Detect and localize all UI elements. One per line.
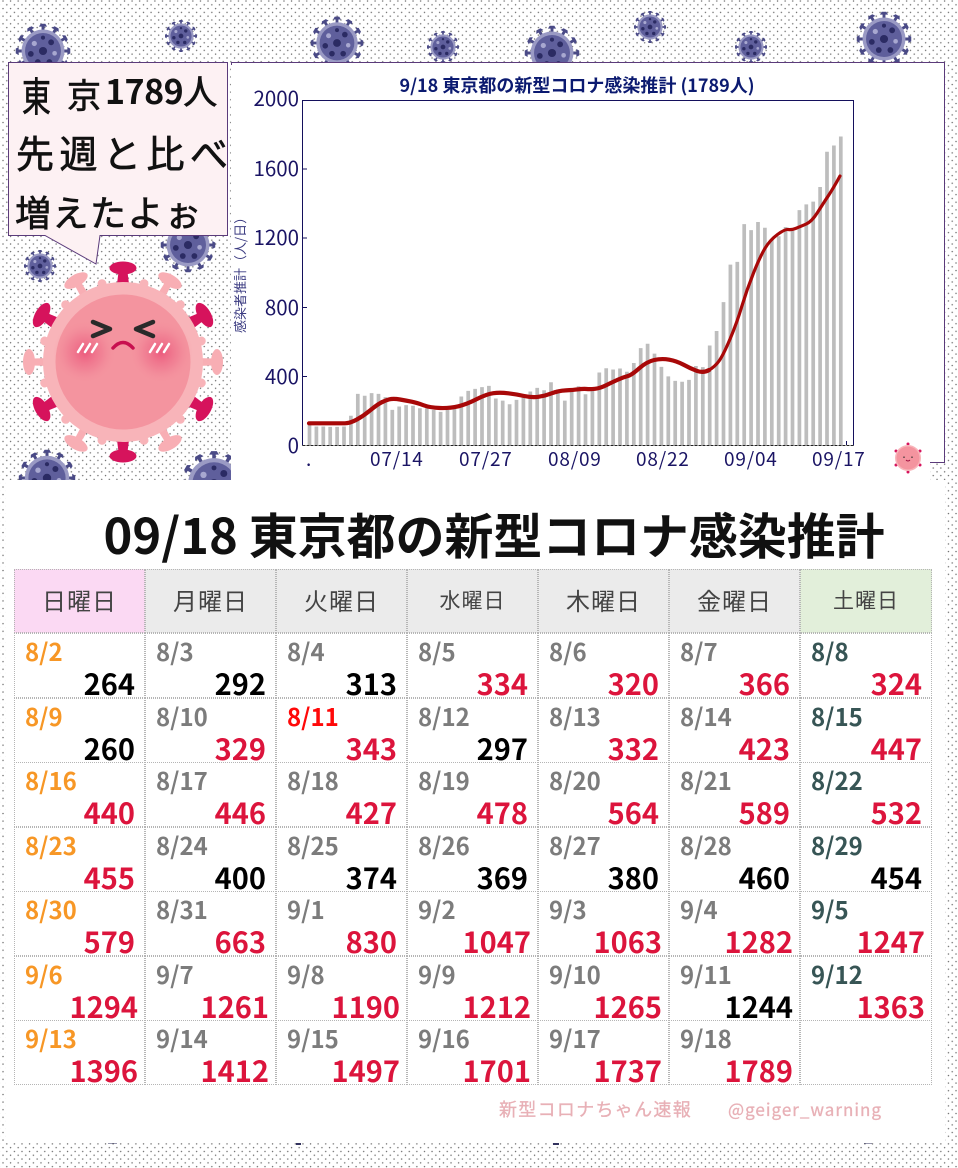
- weekday header row: 火曜日: [304, 582, 379, 617]
- bubble shape: [8, 62, 228, 265]
- week row 9/6 to 9/12: [14, 956, 932, 1027]
- y axis title: 感染者推計（人/日）: [230, 211, 249, 333]
- weekday header row: 水曜日: [440, 585, 506, 615]
- week row 8/2 to 8/8: 292: [215, 662, 266, 704]
- week row 9/13 to 9/18: 1701: [463, 1049, 531, 1091]
- week row 9/6 to 9/12: 9/8: [287, 956, 325, 991]
- week row 8/16 to 8/22: 440: [84, 791, 135, 833]
- week row 9/6 to 9/12: 1261: [201, 985, 269, 1027]
- weekday header row: 土曜日: [833, 585, 899, 615]
- week row 8/9 to 8/15: 8/10: [156, 698, 208, 733]
- smoothed trend line: [309, 176, 840, 423]
- weekday header row: 金曜日: [697, 582, 772, 617]
- weekday header row: 日曜日: [42, 582, 117, 617]
- speech bubble: [8, 62, 234, 265]
- footer credit: @geiger_warning: [728, 1096, 882, 1121]
- bubble text line 1: 京: [67, 69, 101, 118]
- week row 8/9 to 8/15: 297: [477, 727, 528, 769]
- x axis labels: 07/27: [459, 445, 513, 472]
- week row 9/13 to 9/18: [14, 1020, 932, 1091]
- week row 8/30 to 9/5: [14, 891, 932, 962]
- week row 9/13 to 9/18: 1737: [594, 1049, 662, 1091]
- week row 9/13 to 9/18: 1789: [725, 1049, 793, 1091]
- week row 8/23 to 8/29: 8/27: [549, 827, 601, 862]
- week row 9/6 to 9/12: 9/11: [680, 956, 732, 991]
- x axis labels: 08/22: [636, 445, 690, 472]
- week row 8/23 to 8/29: 8/29: [811, 827, 863, 862]
- week row 8/9 to 8/15: 8/15: [811, 698, 863, 733]
- week row 8/9 to 8/15: 8/13: [549, 698, 601, 733]
- week row 8/30 to 9/5: 830: [346, 920, 397, 962]
- week row 8/16 to 8/22: 8/18: [287, 762, 339, 797]
- week row 8/9 to 8/15: 447: [871, 727, 922, 769]
- week row 8/2 to 8/8: 334: [477, 662, 528, 704]
- week row 8/2 to 8/8: 8/4: [287, 633, 325, 668]
- y axis labels: 1200: [253, 221, 299, 251]
- lower white background panel: [6, 480, 945, 1143]
- week row 8/30 to 9/5: 1247: [857, 920, 925, 962]
- week row 8/16 to 8/22: 564: [608, 791, 659, 833]
- week row 8/23 to 8/29: 8/23: [25, 827, 77, 862]
- weekday header row: 月曜日: [173, 582, 248, 617]
- week row 8/30 to 9/5: 1047: [463, 920, 531, 962]
- week row 9/6 to 9/12: 1363: [857, 985, 925, 1027]
- week row 9/6 to 9/12: 1190: [332, 985, 400, 1027]
- week row 8/2 to 8/8: 264: [84, 662, 135, 704]
- plot frame and ticks: [302, 100, 854, 446]
- bubble text line 1: 東: [22, 65, 51, 123]
- virus mascot: [23, 262, 223, 462]
- week row 8/16 to 8/22: 427: [346, 791, 397, 833]
- week row 8/30 to 9/5: 8/30: [25, 891, 77, 926]
- footer credit: 新型コロナちゃん速報: [499, 1096, 692, 1122]
- week row 8/9 to 8/15: 260: [84, 727, 135, 769]
- chart title: 9/18 東京都の新型コロナ感染推計 (1789人): [399, 72, 755, 98]
- week row 9/6 to 9/12: 9/6: [25, 956, 63, 991]
- week row 8/16 to 8/22: 478: [477, 791, 528, 833]
- weekly calendar table: [14, 569, 932, 1091]
- week row 8/23 to 8/29: [14, 827, 932, 898]
- weekday header row: 木曜日: [566, 582, 641, 617]
- week row 8/9 to 8/15: 8/11: [287, 698, 339, 733]
- week row 8/30 to 9/5: 9/5: [811, 891, 849, 926]
- week row 8/30 to 9/5: 579: [84, 920, 135, 962]
- week row 8/16 to 8/22: 8/17: [156, 762, 208, 797]
- week row 8/30 to 9/5: 8/31: [156, 891, 208, 926]
- week row 8/2 to 8/8: 324: [871, 662, 922, 704]
- week row 8/2 to 8/8: 320: [608, 662, 659, 704]
- week row 8/16 to 8/22: [14, 762, 932, 833]
- week row 8/9 to 8/15: 332: [608, 727, 659, 769]
- week row 9/6 to 9/12: 1265: [594, 985, 662, 1027]
- week row 8/23 to 8/29: 374: [346, 856, 397, 898]
- week row 8/23 to 8/29: 400: [215, 856, 266, 898]
- week row 9/13 to 9/18: 9/17: [549, 1020, 601, 1055]
- week row 9/13 to 9/18: 9/14: [156, 1020, 208, 1055]
- week row 8/9 to 8/15: 8/14: [680, 698, 732, 733]
- week row 9/13 to 9/18: 1396: [70, 1049, 138, 1091]
- week row 9/13 to 9/18: 9/16: [418, 1020, 470, 1055]
- y axis labels: 0: [288, 429, 299, 459]
- x axis labels: 08/09: [548, 445, 602, 472]
- main heading: 09/18 東京都の新型コロナ感染推計: [104, 498, 884, 569]
- week row 8/2 to 8/8: 8/7: [680, 633, 718, 668]
- week row 8/9 to 8/15: [14, 698, 932, 769]
- week row 8/2 to 8/8: 366: [739, 662, 790, 704]
- weekday header row: [14, 569, 932, 633]
- week row 8/30 to 9/5: 9/2: [418, 891, 456, 926]
- y axis labels: [253, 82, 299, 459]
- week row 9/13 to 9/18: 9/18: [680, 1020, 732, 1055]
- week row 8/2 to 8/8: [14, 633, 932, 704]
- week row 9/13 to 9/18: 9/13: [25, 1020, 77, 1055]
- y axis labels: 1600: [253, 152, 299, 182]
- week row 9/6 to 9/12: 9/12: [811, 956, 863, 991]
- week row 8/2 to 8/8: 8/3: [156, 633, 194, 668]
- bar and line chart: [302, 100, 922, 474]
- week row 8/30 to 9/5: 1282: [725, 920, 793, 962]
- week row 9/6 to 9/12: 1212: [463, 985, 531, 1027]
- week row 9/6 to 9/12: 9/9: [418, 956, 456, 991]
- bubble text line 2: 先週と比べ: [16, 124, 234, 179]
- bubble text line 3: 増えたよぉ: [15, 185, 203, 237]
- week row 8/2 to 8/8: 8/5: [418, 633, 456, 668]
- week row 8/30 to 9/5: 9/3: [549, 891, 587, 926]
- week row 9/13 to 9/18: 1412: [201, 1049, 269, 1091]
- week row 8/23 to 8/29: 369: [477, 856, 528, 898]
- week row 8/2 to 8/8: 8/6: [549, 633, 587, 668]
- week row 8/16 to 8/22: 589: [739, 791, 790, 833]
- bubble text line 1: [22, 65, 217, 123]
- week row 8/30 to 9/5: 9/1: [287, 891, 325, 926]
- week row 8/9 to 8/15: 329: [215, 727, 266, 769]
- week row 8/23 to 8/29: 8/24: [156, 827, 208, 862]
- daily bars: [310, 137, 841, 446]
- week row 8/30 to 9/5: 9/4: [680, 891, 718, 926]
- y axis labels: 800: [265, 291, 299, 321]
- x axis labels: 07/14: [370, 445, 424, 472]
- week row 8/30 to 9/5: 663: [215, 920, 266, 962]
- y axis labels: 2000: [253, 82, 299, 112]
- week row 8/16 to 8/22: 532: [871, 791, 922, 833]
- week row 9/13 to 9/18: 1497: [332, 1049, 400, 1091]
- week row 8/16 to 8/22: 8/21: [680, 762, 732, 797]
- week row 8/16 to 8/22: 8/20: [549, 762, 601, 797]
- week row 8/9 to 8/15: 8/9: [25, 698, 63, 733]
- week row 8/16 to 8/22: 8/19: [418, 762, 470, 797]
- x axis labels: [306, 445, 866, 472]
- chart white background: [231, 62, 945, 480]
- week row 8/23 to 8/29: 380: [608, 856, 659, 898]
- week row 9/6 to 9/12: 9/7: [156, 956, 194, 991]
- week row 8/2 to 8/8: 8/8: [811, 633, 849, 668]
- week row 8/23 to 8/29: 8/25: [287, 827, 339, 862]
- x axis labels: 09/17: [812, 445, 866, 472]
- week row 8/23 to 8/29: 455: [84, 856, 135, 898]
- x axis labels: .: [306, 445, 312, 472]
- week row 9/6 to 9/12: 9/10: [549, 956, 601, 991]
- week row 8/2 to 8/8: 8/2: [25, 633, 63, 668]
- week row 8/9 to 8/15: 423: [739, 727, 790, 769]
- bubble text line 1: 1789人: [105, 65, 217, 114]
- week row 8/16 to 8/22: 8/22: [811, 762, 863, 797]
- week row 9/13 to 9/18: 9/15: [287, 1020, 339, 1055]
- week row 8/23 to 8/29: 8/26: [418, 827, 470, 862]
- x axis labels: 09/04: [724, 445, 778, 472]
- week row 8/30 to 9/5: 1063: [594, 920, 662, 962]
- chart panel: [230, 62, 945, 480]
- week row 9/6 to 9/12: 1244: [725, 985, 793, 1027]
- footer credit: [499, 1096, 882, 1122]
- week row 8/9 to 8/15: 343: [346, 727, 397, 769]
- week row 8/23 to 8/29: 460: [739, 856, 790, 898]
- small mascot icon: [894, 442, 922, 474]
- week row 8/16 to 8/22: 8/16: [25, 762, 77, 797]
- week row 8/9 to 8/15: 8/12: [418, 698, 470, 733]
- week row 8/16 to 8/22: 446: [215, 791, 266, 833]
- week row 8/2 to 8/8: 313: [346, 662, 397, 704]
- week row 8/23 to 8/29: 454: [871, 856, 922, 898]
- week row 8/23 to 8/29: 8/28: [680, 827, 732, 862]
- y axis labels: 400: [265, 360, 299, 390]
- week row 9/6 to 9/12: 1294: [70, 985, 138, 1027]
